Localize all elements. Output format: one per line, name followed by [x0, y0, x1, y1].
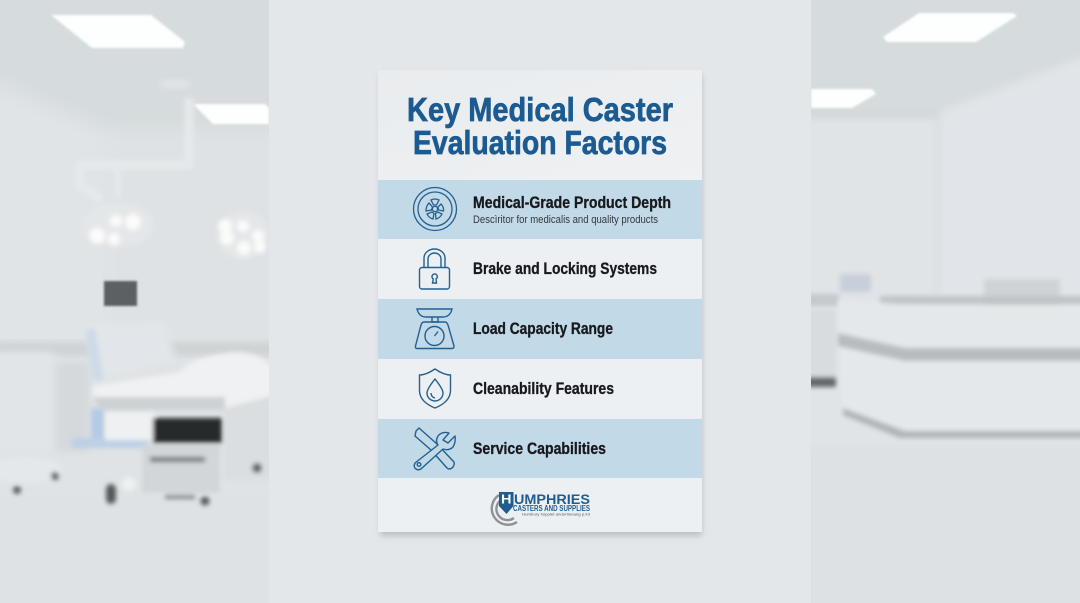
logo shield: [499, 492, 514, 514]
text: row heading: Load Capacity Range: [473, 320, 613, 338]
text: row description: Descìritor for medicalis and quality products: [473, 214, 658, 226]
logo: Humphries Casters and Supplies: CASTERS AND SUPPLIES: [513, 504, 590, 513]
row: Cleanability Features: [378, 359, 702, 419]
row: Service Capabilities: [378, 419, 702, 478]
text: row heading: Cleanability Features: [473, 380, 614, 398]
logo swoosh rings: [492, 495, 517, 525]
equipment cart: [811, 293, 840, 390]
icon: weighing scale: [415, 309, 454, 348]
heading: title: Key Medical Caster: [407, 92, 673, 129]
panel: central wall: [269, 0, 811, 603]
background: blurred left hospital room: [0, 0, 269, 510]
stool: [10, 470, 62, 497]
wall monitor: [104, 281, 137, 306]
logo: Humphries Casters and Supplies: UMPHRIES: [514, 492, 590, 507]
text: row heading: Medical-Grade Product Depth: [473, 194, 671, 212]
icon: crossed wrench and screwdriver: [414, 428, 455, 470]
surgical lamps: [88, 212, 267, 257]
panel: title area: [378, 70, 702, 180]
background: blurred right hospital room: [811, 0, 1080, 441]
icon: padlock: [420, 249, 450, 289]
reception desk: [838, 296, 1080, 438]
equipment stand: [98, 339, 174, 359]
heading: title: Evaluation Factors: [413, 125, 667, 162]
icon: caster wheel: [414, 188, 456, 230]
icon: shield with droplet: [420, 369, 450, 408]
ceiling lights: [51, 15, 269, 124]
ceiling lights: [811, 13, 1017, 108]
wall rail: [0, 342, 280, 356]
row: Brake and Locking Systems: [378, 239, 702, 299]
logo: Humphries Casters and Supplies: H: [501, 492, 512, 506]
row: Medical-Grade Product Depth: [378, 180, 702, 239]
heading: title: [407, 92, 673, 162]
logo: Humphries Casters and Supplies: Humbury hspplet andurtionang p.lnt: [522, 512, 591, 516]
cabinet: [0, 352, 89, 452]
panel: poster card: [378, 70, 702, 532]
card shadow: [380, 74, 702, 536]
text: row heading: Brake and Locking Systems: [473, 260, 657, 278]
row: Load Capacity Range: [378, 299, 702, 359]
monitors behind desk: [839, 273, 1060, 296]
examination bed: [93, 352, 275, 506]
logo: Humphries Casters and Supplies: [492, 492, 591, 525]
surgical lamp arm: [168, 82, 194, 146]
text: row heading: Service Capabilities: [473, 440, 606, 458]
